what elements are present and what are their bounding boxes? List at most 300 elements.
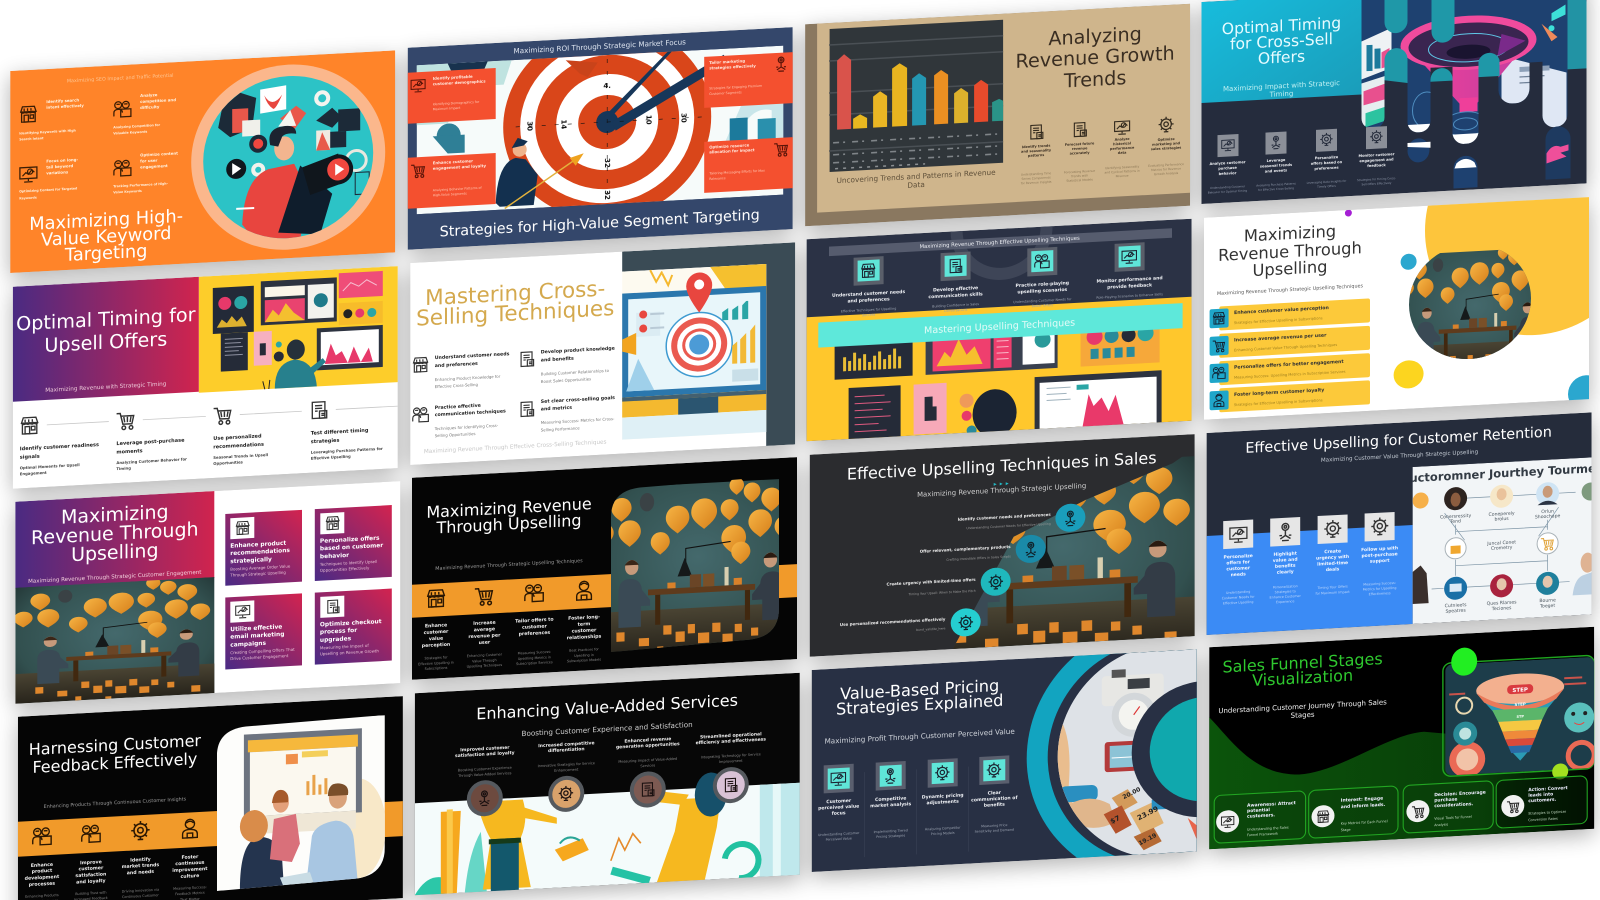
title: Mastering Cross-: [425, 277, 605, 311]
subtitle: Maximizing Customer Value Through Strategic Upselling: [1321, 449, 1479, 464]
column 2: [1064, 122, 1095, 183]
step 2: clearly: [1277, 569, 1294, 576]
row 1: [1210, 298, 1370, 331]
step 1: Success: [862, 313, 876, 317]
card 1: Enhance product: [230, 541, 286, 550]
card: awareness: Awareness: Attract: [1247, 800, 1297, 809]
step 1: Understand customer needs: [832, 289, 905, 299]
circular photo: 19.19: [1138, 832, 1158, 847]
subtitle: Maximizing Profit Through Customer Perceived Value: [825, 727, 1015, 746]
step 1: Customer Needs for: [1222, 595, 1255, 600]
step 4: engagement and: [1359, 157, 1394, 163]
card: interest: and inform leads.: [1341, 802, 1386, 810]
step 1: [20, 414, 99, 476]
column 2: market analysis: [870, 801, 911, 809]
row 3: Measuring Success: Upselling Metrics in Subscription Services: [1234, 370, 1346, 380]
point 3: Measuring Impact of Value-Added: [618, 757, 677, 764]
title: Maximizing High-: [29, 206, 183, 235]
step 3: Opportunities: [213, 459, 244, 466]
title: Effective Upselling for Customer Retention: [1245, 425, 1552, 457]
subtitle: Maximizing Revenue Through Strategic Upselling: [917, 482, 1086, 499]
step 1: Optimal Moments for Upsell: [20, 462, 80, 470]
column 3: [1105, 120, 1140, 179]
title: Harnessing Customer: [29, 731, 201, 759]
item: user engagement: Tracking Performance of High-: [113, 182, 169, 188]
column 1: for Revenue Insights: [1021, 180, 1052, 185]
step 2: Leverage post-purchase: [116, 437, 185, 447]
target numbers: 30: [680, 113, 688, 123]
step 3: Timing Your Offers: [1316, 584, 1348, 590]
card: demographics: Maximum Impact: [433, 106, 461, 111]
card: demographics: customer demographics: [433, 79, 486, 86]
column 3: [515, 584, 554, 666]
step 1: Personalize: [1224, 553, 1253, 561]
step 1: Understanding Customer: [1210, 184, 1246, 190]
blue band: [1207, 525, 1413, 635]
orange band: [412, 564, 797, 618]
point 4: bund_validite_here: [916, 626, 945, 632]
card 2: based on customer: [320, 543, 383, 552]
header block: Optimal Timing for: [16, 303, 196, 336]
step 4: provide feedback: [1107, 282, 1153, 291]
slide: Strategies for High-Value Segment Targeting: [408, 15, 793, 250]
green wave: [1209, 697, 1594, 849]
item: long-tail: Optimizing Content for Targeted: [19, 186, 78, 194]
step 3: Understanding Customer Needs for: [1013, 297, 1072, 304]
target illustration: [416, 46, 784, 214]
column 3: [122, 820, 159, 900]
point 1: [958, 503, 1085, 538]
column dividers: [865, 767, 969, 857]
item 2: Building Customer Relationships to: [541, 368, 610, 377]
item 3: Techniques for Identifying Cross-: [434, 423, 499, 431]
card 2: Opportunities Effectively: [320, 565, 370, 573]
item 4: and metrics: [541, 405, 572, 413]
slide: Analyzing Revenue Growth Trends: [805, 4, 1190, 226]
column 1: Enhance: [425, 622, 447, 630]
circular photo: 23.99: [1136, 805, 1160, 822]
step 4: [311, 399, 383, 461]
column 3: [922, 758, 964, 837]
header block: Revenue Through: [31, 518, 199, 549]
step 1: Behavior for Optimal Timing: [1208, 189, 1247, 195]
column 4: Feedback Metrics: [175, 891, 205, 896]
slide: Maximizing Revenue Through Upselling (circle photo): [1204, 109, 1600, 432]
step 2: seasonal trends: [1260, 163, 1292, 169]
step 4: Role-Playing Scenarios to Enhance Skills: [1096, 292, 1163, 300]
header block: [1202, 0, 1362, 103]
item: competition: difficulty: [140, 104, 160, 110]
card 4: Optimize checkout: [320, 619, 382, 628]
point 4: [840, 608, 981, 643]
subtitle: Maximizing Revenue Through Strategic Upselling Techniques: [435, 558, 583, 572]
column 3: Tailor offers to: [515, 617, 554, 625]
step 4: Leveraging Purchase Patterns for: [311, 446, 383, 455]
step 4: Effectiveness: [1369, 591, 1391, 596]
card: action: leads into: [1528, 791, 1553, 799]
title: Value Keyword: [41, 223, 171, 251]
column 4: relationships: [567, 634, 601, 641]
card: engagement: High-Value Segments: [433, 192, 467, 197]
point 4: Streamlined operational: [700, 731, 762, 741]
card 4: Upselling on Revenue Growth: [320, 648, 379, 656]
item 2: and benefits: [541, 356, 574, 364]
illustration: marketer in circle: [191, 59, 385, 255]
item 3: Selling Opportunities: [435, 431, 475, 438]
column 3: Identifying Seasonality: [1105, 164, 1139, 170]
point 2: Offer relevant, complementary products: [920, 544, 1011, 554]
step 2: Develop effective: [933, 285, 978, 294]
step 3: Leveraging Data Insights for: [1307, 179, 1347, 185]
subtitle: Understanding Customer Journey Through Sales: [1218, 698, 1387, 715]
column 4: Clear: [988, 790, 1002, 797]
column 2: accurately: [1070, 151, 1090, 156]
column 3: Pricing Models: [931, 831, 955, 836]
step 3: Use personalized: [213, 433, 262, 442]
journey map labels: Teciones: [1491, 605, 1512, 612]
step 4: post-purchase: [1361, 551, 1398, 559]
title: Analyzing: [1048, 22, 1142, 50]
point 2: differentiation: [548, 746, 585, 754]
column 4: Subscription Models: [567, 658, 601, 663]
step 2: Strategies to: [1275, 589, 1296, 594]
top band text: Maximizing ROI Through Strategic Market Focus: [514, 37, 686, 56]
column 3: Subscription Services: [516, 660, 553, 666]
header block: Maximizing: [61, 501, 169, 529]
step 1: [832, 255, 905, 319]
step 4: Sell Offers Effectively: [1362, 181, 1392, 186]
subtitle: Data: [907, 180, 925, 190]
step 4: [1361, 512, 1398, 597]
column 4: Measuring Success:: [173, 885, 207, 891]
point 2: Crafting Irresistible Offers in Sales Scripts: [946, 554, 1011, 562]
funnel illustration: STEP: [1515, 701, 1526, 707]
card 2: behavior: [320, 553, 349, 560]
card: interest: Interest: Engage: [1341, 795, 1383, 804]
card: resources: [704, 137, 793, 193]
card 1: Boosting Average Order Value: [230, 563, 291, 572]
step 1: purchase: [1218, 166, 1237, 171]
step 2: for Effective Cross-Selling: [1258, 186, 1294, 192]
card 4: Measuring the Impact of: [320, 643, 369, 650]
card: action: customers.: [1528, 797, 1557, 804]
item: user engagement: engagement: [140, 163, 168, 170]
column 4: continuous: [175, 860, 205, 867]
column 1: Enhancing Products: [25, 893, 59, 899]
monitor illustration: [622, 264, 766, 440]
step 4: feedback: [1367, 163, 1386, 168]
item: competition: Valuable Keywords: [113, 130, 147, 135]
card 3: Drive Customer Engagement: [230, 653, 289, 661]
decorative dots: [1345, 109, 1600, 424]
step 4: Metrics for Upselling: [1363, 586, 1396, 592]
column 1: product: [32, 868, 53, 875]
item: user engagement: [113, 151, 178, 194]
card: awareness: [1214, 791, 1306, 843]
column 1: [25, 827, 60, 900]
step 3: deals: [1326, 566, 1340, 573]
step 3: limited-time: [1317, 560, 1348, 568]
header block: Upselling: [71, 540, 159, 566]
column 1: [1021, 124, 1052, 185]
column 3: Measuring Success:: [518, 650, 551, 656]
column 4: [971, 755, 1018, 834]
journey map labels: Orlun: [1541, 508, 1554, 515]
column 4: marketing and: [1152, 141, 1181, 147]
step 2: [1270, 517, 1301, 605]
funnel illustration: [1362, 0, 1587, 193]
slide: Value-Based Pricing Strategies Explained: [812, 612, 1303, 900]
row 3: Personalize offers for better engagement: [1234, 359, 1344, 371]
column 4: Optimize: [1158, 137, 1175, 142]
slide: Maximizing High-Value Keyword Targeting: [10, 50, 395, 273]
card: resources: Tailoring Messaging Efforts for Max: [708, 169, 765, 176]
point 3: Timing Your Upsell: When to Make the Pitch: [908, 589, 976, 596]
column 2: average: [474, 626, 495, 633]
item: long-tail: Focus on long-: [46, 157, 78, 164]
target numbers: 30: [526, 121, 534, 131]
item: search intent: Search Intent: [19, 136, 44, 142]
column 1: Series Components: [1022, 175, 1051, 181]
column 1: Perceived Value: [826, 836, 852, 842]
point 4: [696, 731, 766, 805]
column 3: Upselling Metrics in: [518, 655, 551, 661]
title: Sales Funnel Stages: [1222, 649, 1383, 677]
column 4: customer: [572, 627, 597, 635]
column 2: customer: [79, 865, 104, 872]
step 2: and events: [1265, 168, 1287, 174]
column 2: Value Through: [472, 658, 497, 663]
card: awareness: customers.: [1247, 812, 1275, 820]
column 4: Measuring Price: [981, 823, 1007, 828]
step 2: [928, 251, 983, 314]
card: demographics: Identifying Demographics for: [433, 100, 480, 106]
column 2: Improve: [80, 859, 102, 866]
column 1: Customer: [826, 798, 852, 805]
step 1: Analyze customer: [1209, 160, 1246, 166]
step 3: upselling scenarios: [1017, 287, 1068, 296]
item 4: Set clear cross-selling goals: [541, 395, 615, 405]
step 2: Highlight: [1274, 551, 1298, 558]
card: interest: Key Metrics for Each Funnel: [1341, 819, 1388, 826]
card: interest: [1309, 786, 1398, 838]
column 3: Dynamic pricing: [922, 792, 964, 801]
card: demographics: [408, 68, 496, 124]
header block: for Cross-Sell: [1230, 30, 1333, 53]
journey map image: [1400, 457, 1600, 625]
point 1: Improved customer: [460, 745, 510, 753]
point 2: [538, 740, 595, 813]
step 1: Effective Techniques for Upselling: [841, 306, 896, 313]
photo: balloons wedge: [927, 452, 1197, 678]
step 4: Test different timing: [311, 428, 369, 437]
title: Enhancing Value-Added Services: [476, 691, 738, 724]
step 1: customer: [1226, 565, 1251, 572]
slide: Sales Funnel Stages Visualization: [1209, 627, 1594, 849]
title band: [818, 303, 1183, 348]
funnel illustration: STP: [1516, 714, 1524, 719]
title: Effective Upselling Techniques in Sales: [847, 448, 1157, 484]
row 4: [1210, 380, 1370, 413]
column 2: Forecast future: [1065, 141, 1095, 147]
column 4: communication of: [971, 795, 1018, 803]
step 4: strategies: [311, 438, 339, 445]
row 2: Enhancing Customer Value Through Upselling Techniques: [1234, 343, 1337, 352]
column 2: [870, 761, 911, 839]
column 4: [567, 580, 601, 663]
point 1: Boosting Customer Experience: [458, 766, 512, 772]
step 4: Effective Upselling: [311, 454, 351, 461]
card: awareness: Understanding the Sales: [1247, 826, 1289, 832]
column 1: Strategies for: [424, 655, 448, 661]
card: decision: purchase: [1434, 797, 1457, 804]
column 2: user: [479, 639, 491, 646]
card: marketing: Customer Segments: [709, 90, 742, 96]
card: awareness: potential: [1247, 807, 1270, 814]
item: long-tail: Keywords: [19, 196, 37, 201]
card: decision: Analysis: [1434, 823, 1448, 827]
step 3: Timely Offers: [1316, 184, 1336, 189]
slate frame: [622, 242, 795, 454]
journey map labels: Bourne: [1539, 597, 1556, 604]
slide: Mastering Cross-Selling Techniques: [410, 242, 795, 465]
card: engagement: [408, 153, 496, 209]
column 4: culture: [181, 873, 199, 880]
step 2: Conversations: [944, 308, 968, 313]
column 1: [818, 763, 860, 842]
slide: Effective Upselling Techniques in Sales: [810, 434, 1197, 685]
step 2: Building Confidence in Sales: [932, 302, 979, 309]
item: user engagement: for user: [140, 158, 158, 164]
header block: Upsell Offers: [44, 327, 167, 357]
step 1: signals: [20, 454, 40, 461]
header block: Optimal Timing: [1222, 14, 1341, 38]
card: interest: Stage: [1341, 828, 1351, 832]
card 3: email marketing: [230, 632, 284, 641]
column 3: historical: [1113, 141, 1131, 146]
card: demographics: Identify profitable: [433, 74, 473, 81]
column 4: [1148, 116, 1184, 177]
step 2: value and: [1273, 557, 1298, 564]
slide: Effective Upselling for Customer Retention: [1207, 412, 1600, 635]
column 2: Upselling Techniques: [467, 663, 502, 669]
step 2: Enhance Customer: [1270, 594, 1301, 600]
journey map labels: Tend: [1449, 518, 1461, 525]
card: marketing: Strategies for Engaging Premium: [709, 84, 762, 91]
step 1: offers for: [1226, 559, 1251, 566]
card: resources: Relevance: [709, 176, 726, 181]
row 2: Increase average revenue per user: [1234, 333, 1327, 343]
column 1: value: [429, 636, 443, 642]
item 1: Understand customer needs: [435, 351, 510, 361]
item 2: [521, 346, 615, 385]
column 3: Revenue: [1116, 174, 1129, 178]
column 4: Best Practices for: [569, 647, 599, 653]
slide: Optimal Timing for Cross-Sell Offers: [1202, 0, 1587, 204]
column 1: Understanding Time: [1021, 171, 1051, 177]
column 1: Subscriptions: [425, 666, 448, 671]
point 3: Services: [640, 763, 655, 768]
column 2: revenue per: [468, 632, 501, 640]
row 2: [1210, 326, 1370, 358]
column 1: focus: [832, 810, 846, 817]
point 1: Through Value-Added Services: [457, 771, 512, 778]
column 1: Understanding Customer: [818, 831, 860, 837]
step 2: moments: [116, 448, 143, 456]
card 1: strategically: [230, 557, 272, 565]
card 3: Utilize effective: [230, 624, 282, 633]
circular photo: 20.00: [1122, 786, 1142, 801]
item: user engagement: Optimize content: [140, 151, 178, 158]
target numbers: 32: [603, 158, 611, 168]
point 2: Innovative Strategies for Service: [538, 761, 595, 768]
item 1: Effective Cross-Selling: [435, 382, 479, 389]
footer text: Maximizing Revenue Through Effective Cross-Selling Techniques: [424, 439, 607, 455]
journey map labels: [1400, 461, 1600, 617]
card 1: Through Strategic Upselling: [229, 570, 286, 578]
column 4: improvement: [172, 866, 208, 874]
card 4: process for: [320, 628, 357, 636]
subtitle: Boosting Customer Experience and Satisfaction: [522, 720, 693, 738]
item 4: [521, 395, 615, 434]
top banner: Maximizing Revenue Through Effective Upselling Techniques: [919, 236, 1080, 250]
card 2: Personalize offers: [320, 536, 380, 545]
point 3: Create urgency with limited-time offers: [887, 577, 976, 587]
column 3: and needs: [127, 869, 154, 876]
step 2: benefits: [1275, 563, 1296, 570]
column 3: data: [1118, 151, 1127, 155]
slide: Optimal Timing for Upsell Offers: [13, 266, 398, 489]
column 1: [418, 589, 454, 671]
slide: Mastering Upselling Techniques: [807, 219, 1192, 447]
step 1: Engagement: [20, 470, 47, 476]
step 3: Seasonal Trends in Upsell: [213, 452, 268, 460]
point 3: Enhanced revenue: [624, 736, 671, 745]
item: competition: Analyze: [140, 92, 158, 98]
step 3: Better Offers: [1032, 303, 1053, 308]
point 2: Increased competitive: [538, 740, 595, 749]
step 4: Follow up with: [1361, 545, 1398, 553]
column 1: patterns: [1028, 153, 1044, 158]
subtitle: Stages: [1291, 711, 1315, 720]
title: Revenue Growth: [1016, 42, 1175, 73]
column 2: [467, 588, 503, 669]
card: decision: Visual Tools for Funnel: [1434, 815, 1472, 821]
title: Maximizing Revenue: [426, 494, 592, 522]
card: engagement: Enhance customer: [433, 158, 473, 165]
column 3: adjustments: [927, 799, 959, 806]
step 2: Personalization: [1273, 584, 1298, 589]
column 2: [74, 825, 108, 900]
title band: Mastering Upselling Techniques: [924, 317, 1075, 337]
item 1: and preferences: [435, 361, 478, 369]
card 4: [315, 589, 392, 665]
step 4: Monitor customer: [1359, 152, 1395, 158]
card: action: Strategies to Optimize: [1528, 810, 1566, 816]
column 1: Effective Upselling in: [418, 660, 454, 666]
column 4: sales strategies: [1151, 146, 1181, 151]
step 3: Create: [1324, 548, 1341, 555]
title: Maximizing: [1244, 222, 1336, 246]
card 3: Creating Compelling Offers That: [230, 647, 295, 655]
card 4: upgrades: [320, 636, 352, 644]
title: Targeting: [64, 241, 147, 266]
column 2: Building Trust with: [75, 890, 107, 896]
journey map labels: Shoochape: [1535, 513, 1560, 520]
item 3: Practice effective: [435, 403, 481, 411]
column 2: Trends with: [1070, 173, 1088, 178]
column 1: processes: [29, 881, 55, 888]
